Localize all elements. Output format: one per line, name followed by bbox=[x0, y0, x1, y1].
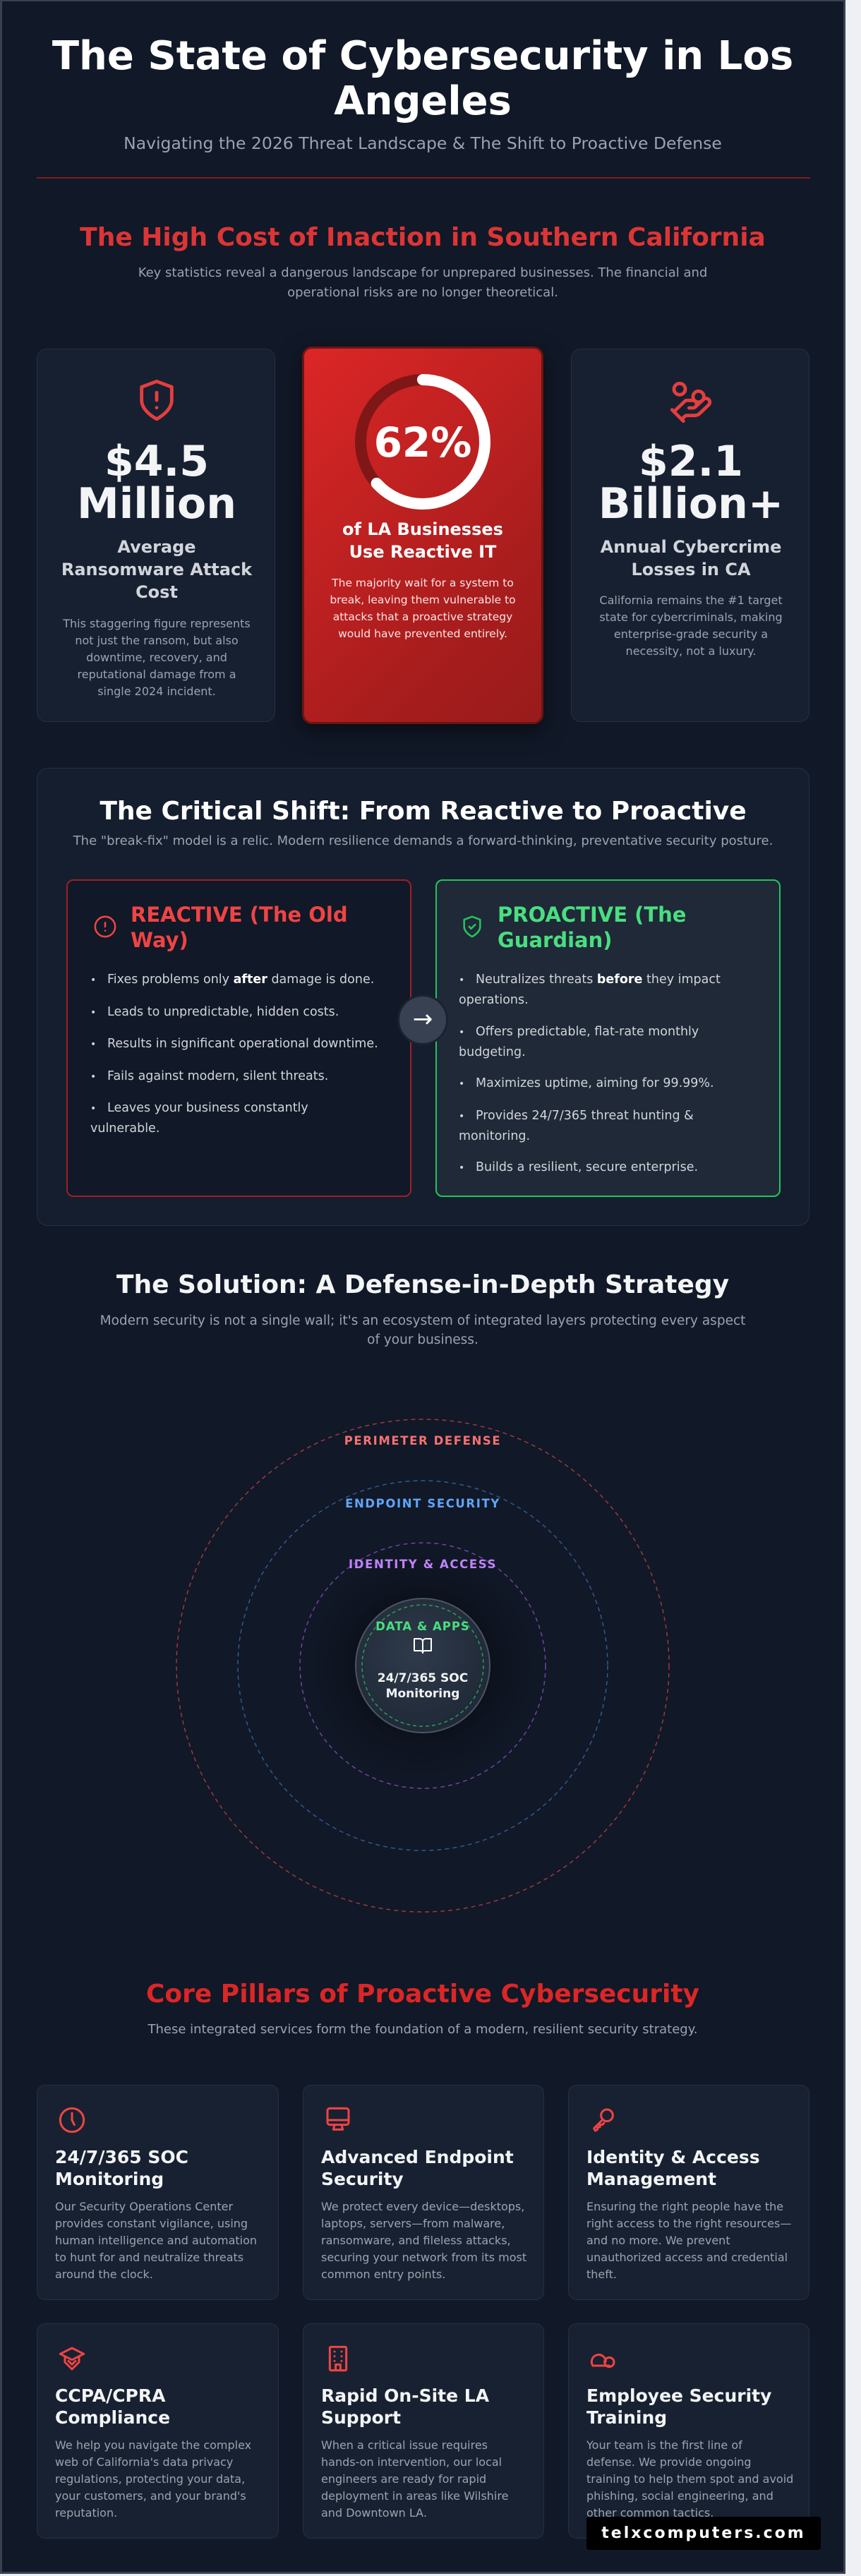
panel: proactive bbox=[435, 879, 781, 1197]
heading: critical shift: The Critical Shift: From Reactive to Proactive bbox=[100, 797, 747, 826]
stat description: reputational damage from a bbox=[78, 668, 236, 681]
proactive bullet list: Neutralizes threats before they impact bbox=[476, 973, 721, 987]
pillar: SOC monitoring: around the clock. bbox=[55, 2268, 153, 2281]
pillar: employee training bbox=[568, 2323, 809, 2539]
pillar: on-site support: deployment in areas like Wilshire bbox=[321, 2489, 508, 2503]
donut chart 62% bbox=[355, 374, 490, 510]
pillar: compliance: CCPA/CPRA bbox=[55, 2385, 165, 2406]
reactive heading: REACTIVE (The Old bbox=[131, 903, 348, 927]
stat value: Billion+ bbox=[598, 479, 783, 529]
pillar: SOC monitoring: human intelligence and automation bbox=[55, 2234, 257, 2247]
proactive bullet list: Maximizes uptime, aiming for 99.99%. bbox=[476, 1076, 714, 1090]
stat description: necessity, not a luxury. bbox=[626, 644, 756, 658]
icon: monitor bbox=[326, 2107, 350, 2131]
stat description: would have prevented entirely. bbox=[338, 627, 507, 640]
pillar: employee training: training to help them spot and avoid bbox=[586, 2472, 793, 2486]
proactive bullet list bbox=[459, 973, 721, 1174]
subtitle: defense in depth: Modern security is not a single wall; it's an ecosystem of integrated layers protecting every aspect bbox=[100, 1313, 745, 1328]
pillar: SOC monitoring: Monitoring bbox=[55, 2169, 164, 2189]
proactive bullet list: operations. bbox=[459, 993, 529, 1007]
stat description: not just the ransom, but also bbox=[75, 634, 239, 647]
stat value bbox=[77, 437, 236, 529]
subtitle: critical shift: The "break-fix" model is a relic. Modern resilience demands a forward-thinking, preventative security posture. bbox=[73, 833, 773, 848]
icon: alert circle bbox=[95, 916, 116, 937]
reactive bullet list: • bbox=[90, 975, 96, 986]
pillar: compliance: We help you navigate the complex bbox=[55, 2438, 251, 2452]
stat label bbox=[342, 519, 503, 562]
pillar: compliance: regulations, protecting your data, bbox=[55, 2472, 245, 2486]
icon: compliance badge bbox=[59, 2347, 85, 2371]
stat label: Ransomware Attack bbox=[61, 560, 252, 579]
stat label: Average bbox=[117, 537, 196, 557]
proactive bullet list: • bbox=[459, 1162, 464, 1174]
proactive bullet list: budgeting. bbox=[459, 1045, 526, 1059]
icon: key bbox=[593, 2109, 614, 2132]
proactive bullet list: • bbox=[459, 1078, 464, 1090]
pillar: SOC monitoring: 24/7/365 SOC bbox=[55, 2147, 188, 2167]
subtitle: Navigating the 2026 Threat Landscape & The Shift to Proactive Defense bbox=[124, 133, 722, 153]
pillar: endpoint security: laptops, servers—from malware, bbox=[321, 2217, 505, 2230]
stat description bbox=[63, 617, 251, 698]
proactive bullet list: Offers predictable, flat-rate monthly bbox=[476, 1025, 699, 1039]
layer: endpoint: ENDPOINT SECURITY bbox=[345, 1497, 500, 1510]
icon: building bbox=[329, 2346, 347, 2371]
pillar: SOC monitoring bbox=[37, 2085, 279, 2300]
stat description: This staggering figure represents bbox=[63, 617, 251, 630]
stat label: Annual Cybercrime bbox=[601, 537, 781, 557]
layer: identity: IDENTITY & ACCESS bbox=[349, 1558, 497, 1571]
reactive bullet list: Leaves your business constantly bbox=[107, 1101, 308, 1115]
layer: endpoint bbox=[238, 1481, 608, 1850]
watermark bbox=[586, 2517, 821, 2550]
heading: high cost: The High Cost of Inaction in Southern California bbox=[80, 223, 766, 252]
pillar: compliance: your customers, and your brand's bbox=[55, 2489, 246, 2503]
stat label: Use Reactive IT bbox=[349, 542, 496, 562]
proactive heading: PROACTIVE (The bbox=[498, 903, 686, 927]
stat description: enterprise-grade security a bbox=[614, 627, 768, 641]
pillar: endpoint security: Advanced Endpoint bbox=[321, 2147, 514, 2167]
reactive bullet list: Results in significant operational downtime. bbox=[107, 1037, 378, 1051]
pillar: employee training: Your team is the first line of bbox=[586, 2438, 742, 2452]
stat description: attacks that a proactive strategy bbox=[333, 610, 512, 623]
title: Angeles bbox=[334, 78, 512, 124]
pillar: employee training: Training bbox=[586, 2407, 667, 2428]
reactive bullet list bbox=[90, 973, 378, 1136]
stat description: break, leaving them vulnerable to bbox=[330, 594, 516, 606]
proactive bullet list: monitoring. bbox=[459, 1129, 530, 1143]
proactive bullet list: Provides 24/7/365 threat hunting & bbox=[476, 1108, 694, 1122]
pillar: endpoint security bbox=[303, 2085, 544, 2300]
pillar: compliance: reputation. bbox=[55, 2506, 117, 2520]
pillar: employee training: phishing, social engineering, and bbox=[586, 2489, 773, 2503]
intro text: high cost: Key statistics reveal a dangerous landscape for unprepared businesses. The financial and bbox=[138, 265, 707, 280]
stat value: Million bbox=[77, 479, 236, 529]
pillar: on-site support: Rapid On-Site LA bbox=[321, 2385, 489, 2406]
heading: core pillars: Core Pillars of Proactive Cybersecurity bbox=[146, 1980, 699, 2009]
icon: shield alert bbox=[140, 380, 174, 421]
icon: training bbox=[590, 2353, 615, 2369]
pillar: endpoint security: securing your network from its most bbox=[321, 2251, 526, 2264]
pillar: SOC monitoring: to hunt for and neutralize threats bbox=[55, 2251, 243, 2264]
stat value bbox=[598, 437, 783, 529]
layer: identity bbox=[300, 1543, 546, 1788]
pillar: compliance: Compliance bbox=[55, 2407, 170, 2428]
panel: reactive bbox=[66, 879, 411, 1197]
layer: core data & apps bbox=[356, 1599, 490, 1733]
heading: defense in depth: The Solution: A Defense-in-Depth Strategy bbox=[116, 1270, 729, 1299]
stat description: single 2024 incident. bbox=[97, 685, 216, 698]
subtitle: defense in depth: of your business. bbox=[367, 1332, 478, 1347]
pillar: on-site support bbox=[303, 2323, 544, 2539]
icon: clock bbox=[59, 2107, 85, 2133]
proactive heading: Guardian) bbox=[498, 928, 613, 952]
layer: core data & apps: 24/7/365 SOC bbox=[378, 1671, 468, 1685]
stat description: The majority wait for a system to bbox=[332, 577, 514, 589]
stat card: ransomware cost bbox=[37, 349, 275, 722]
pillar: compliance bbox=[37, 2323, 279, 2539]
pillar: on-site support: Support bbox=[321, 2407, 401, 2428]
pillar: on-site support: When a critical issue requires bbox=[321, 2438, 488, 2452]
stat description: California remains the #1 target bbox=[599, 594, 783, 607]
reactive bullet list: • bbox=[90, 1039, 96, 1050]
stat label bbox=[61, 537, 253, 602]
title bbox=[52, 33, 793, 124]
pillar: on-site support: engineers are ready for rapid bbox=[321, 2472, 486, 2486]
pillar: employee training: other common tactics. bbox=[586, 2506, 714, 2520]
layer: perimeter: PERIMETER DEFENSE bbox=[344, 1434, 501, 1448]
pillar: employee training: defense. We provide ongoing bbox=[586, 2455, 752, 2469]
pillar: identity & access: theft. bbox=[586, 2268, 617, 2281]
intro text: high cost bbox=[138, 265, 707, 300]
arrow: reactive to proactive bbox=[397, 994, 448, 1045]
intro text: high cost: operational risks are no longer theoretical. bbox=[287, 285, 558, 300]
pillar: on-site support: and Downtown LA. bbox=[321, 2506, 427, 2520]
stat description: downtime, recovery, and bbox=[86, 651, 227, 664]
watermark: telxcomputers.com bbox=[601, 2524, 806, 2542]
stat value: $4.5 bbox=[104, 437, 209, 486]
stat description: state for cybercriminals, making bbox=[599, 610, 783, 624]
icon: hand with coins bbox=[670, 381, 711, 423]
proactive bullet list: • bbox=[459, 1111, 464, 1122]
proactive bullet list: Builds a resilient, secure enterprise. bbox=[476, 1160, 698, 1174]
stat card: cybercrime losses bbox=[571, 349, 809, 722]
layer: perimeter bbox=[176, 1419, 669, 1912]
arrow: reactive to proactive: → bbox=[413, 1005, 433, 1033]
stat label: Losses in CA bbox=[631, 560, 751, 579]
stat label: Cost bbox=[136, 582, 178, 602]
reactive bullet list: Fails against modern, silent threats. bbox=[107, 1069, 328, 1083]
stat value: $2.1 bbox=[639, 437, 743, 486]
reactive bullet list: • bbox=[90, 1071, 96, 1083]
pillar: employee training: Employee Security bbox=[586, 2385, 771, 2406]
subtitle: defense in depth bbox=[100, 1313, 745, 1347]
pillar: identity & access: right access to the right resources— bbox=[586, 2217, 791, 2230]
reactive bullet list: • bbox=[90, 1006, 96, 1018]
stat label bbox=[600, 537, 781, 579]
pillar: endpoint security: We protect every device—desktops, bbox=[321, 2200, 524, 2213]
pillar: endpoint security: Security bbox=[321, 2169, 404, 2189]
title: The State of Cybersecurity in Los bbox=[52, 33, 793, 79]
reactive bullet list: Leads to unpredictable, hidden costs. bbox=[107, 1005, 339, 1019]
proactive bullet list: • bbox=[459, 975, 464, 986]
pillar: identity & access: Ensuring the right people have the bbox=[586, 2200, 783, 2213]
proactive heading bbox=[498, 903, 686, 952]
pillar: identity & access: Identity & Access bbox=[586, 2147, 760, 2167]
pillar: on-site support: hands-on intervention, our local bbox=[321, 2455, 502, 2469]
stat description bbox=[599, 594, 783, 658]
pillar: identity & access: and no more. We prevent bbox=[586, 2234, 730, 2247]
reactive bullet list: vulnerable. bbox=[90, 1121, 159, 1136]
pillar: identity & access bbox=[568, 2085, 809, 2300]
pillar: SOC monitoring: provides constant vigilance, using bbox=[55, 2217, 248, 2230]
pillar: identity & access: Management bbox=[586, 2169, 716, 2189]
reactive heading: Way) bbox=[131, 928, 188, 952]
subtitle: core pillars: These integrated services form the foundation of a modern, resilient security strategy. bbox=[147, 2022, 698, 2037]
icon: shield check bbox=[463, 916, 481, 937]
donut chart 62%: 62% bbox=[374, 419, 471, 467]
pillar: identity & access: unauthorized access and credential bbox=[586, 2251, 788, 2264]
stat label: of LA Businesses bbox=[342, 519, 503, 539]
panel: critical shift bbox=[37, 768, 809, 1226]
reactive heading bbox=[131, 903, 348, 952]
stat card: 62% reactive IT bbox=[302, 347, 543, 724]
reactive bullet list: • bbox=[90, 1103, 96, 1114]
pillar: compliance: web of California's data privacy bbox=[55, 2455, 233, 2469]
layer: core data & apps: Monitoring bbox=[386, 1687, 459, 1701]
pillar: SOC monitoring: Our Security Operations Center bbox=[55, 2200, 233, 2213]
layer: core data & apps: DATA & APPS bbox=[375, 1620, 470, 1633]
pillar: endpoint security: common entry points. bbox=[321, 2268, 445, 2281]
proactive bullet list: • bbox=[459, 1026, 464, 1037]
reactive bullet list: Fixes problems only after damage is done. bbox=[107, 973, 374, 987]
stat description bbox=[330, 577, 516, 640]
chart: concentric defense layers bbox=[176, 1419, 670, 1913]
pillar: endpoint security: ransomware, and fileless attacks, bbox=[321, 2234, 511, 2247]
